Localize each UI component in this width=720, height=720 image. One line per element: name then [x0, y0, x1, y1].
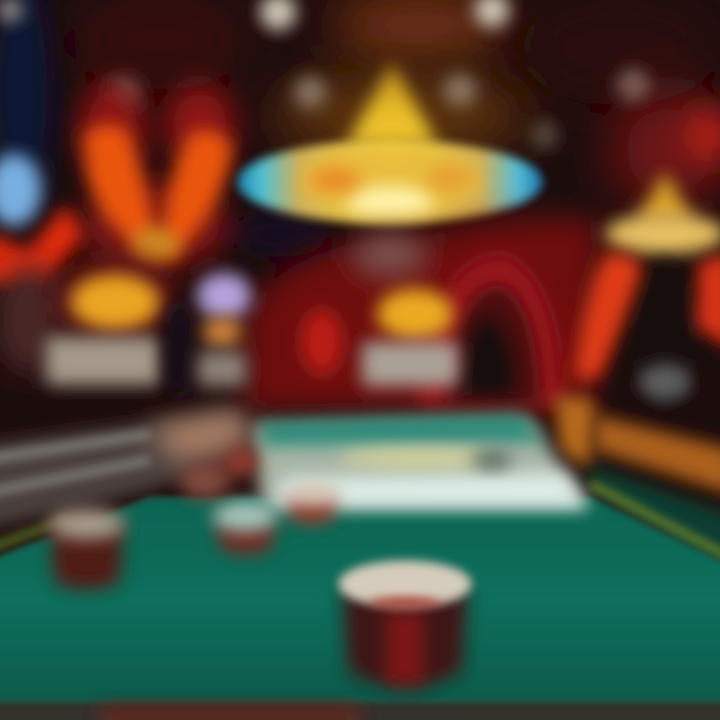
wood and grey rail: left — [0, 410, 250, 530]
table front edge — [0, 702, 720, 720]
flame drapes: left — [78, 80, 236, 270]
chandelier — [238, 62, 542, 223]
left blue panel and red drape — [0, 154, 84, 288]
lamp and machine: left — [0, 258, 196, 400]
poker chip stack: small left — [179, 446, 258, 500]
far table with cards — [250, 414, 590, 508]
poker chip stack: foreground — [339, 561, 471, 687]
lamp and machine: centre — [362, 289, 458, 386]
right lamp and drapes — [574, 90, 720, 410]
lamp and machine: lavender — [197, 273, 251, 386]
poker chip stack: far left — [49, 509, 125, 590]
poker chip stack: behind — [286, 484, 338, 524]
ceiling lights — [0, 0, 650, 149]
poker chip stack: middle — [213, 501, 277, 555]
wood rail: right — [555, 395, 720, 590]
green felt table — [0, 484, 720, 705]
red arched wall — [245, 218, 600, 410]
